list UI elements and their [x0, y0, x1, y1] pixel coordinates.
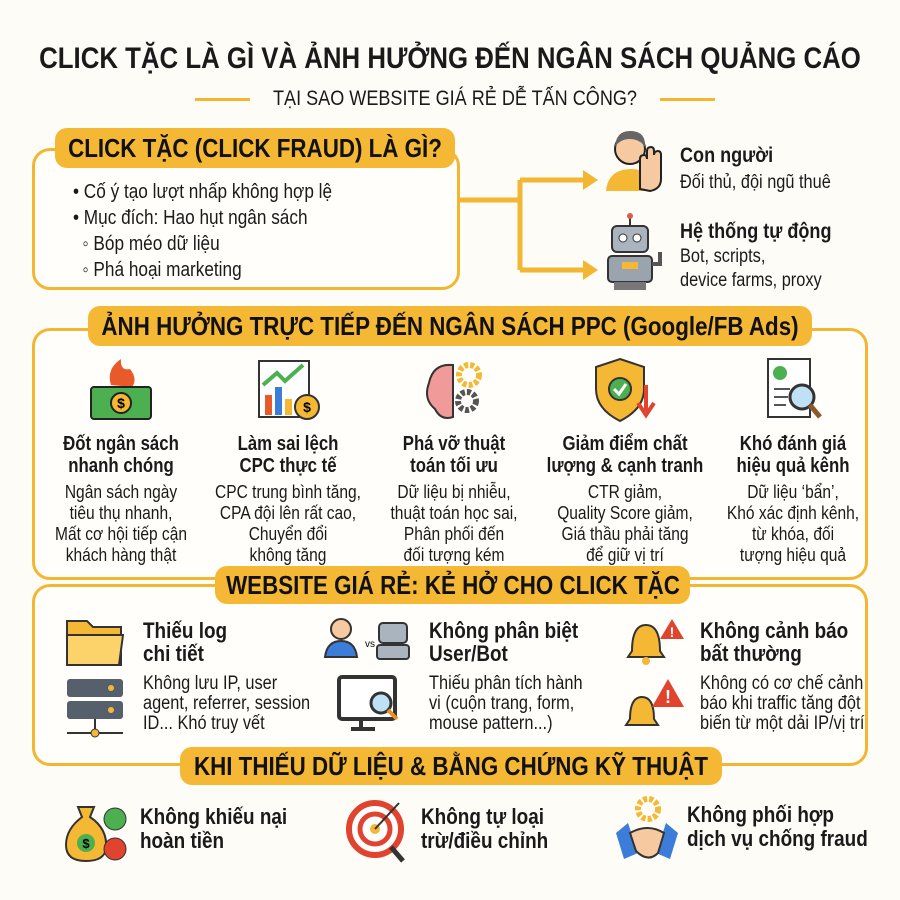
column: CPC	[215, 360, 361, 565]
icon: user vs bot & monitor	[324, 618, 410, 731]
item: missing logs: Thiếu log	[143, 618, 227, 643]
column: algorithm: thuật toán học sai,	[390, 502, 517, 523]
column: algorithm: Phân phối đến	[404, 523, 504, 544]
item: no refund	[65, 804, 287, 862]
text: human: Đối thủ, đội ngũ thuê	[680, 172, 831, 193]
bullet list: ◦ Phá hoại marketing	[83, 259, 242, 281]
title: CLICK TẶC LÀ GÌ VÀ ẢNH HƯỞNG ĐẾN NGÂN SÁCH QUẢNG CÁO	[39, 42, 861, 75]
column: channel evaluation: Khó đánh giá	[740, 433, 846, 455]
item: no anti-fraud service: Không phối hợp	[687, 802, 834, 827]
icon: chart: $	[303, 399, 311, 415]
item: missing logs: agent, referrer, session	[143, 693, 310, 714]
icon: target	[346, 800, 405, 863]
item: no exclusion: trừ/điều chỉnh	[421, 828, 548, 853]
text: automated: Hệ thống tự động	[680, 220, 832, 243]
icon: burning money	[90, 359, 152, 420]
column: CPC: Làm sai lệch	[238, 433, 338, 455]
column: algorithm: đối tượng kém	[404, 544, 504, 565]
item: no alerts	[624, 618, 864, 734]
icon: shield	[595, 358, 656, 422]
bullet list: • Cố ý tạo lượt nhấp không hợp lệ	[73, 181, 332, 203]
icon: chart	[258, 360, 320, 420]
column: burn budget: tiêu thụ nhanh,	[70, 502, 172, 523]
column: burn budget	[55, 359, 187, 565]
icon: robot	[607, 213, 662, 290]
column: channel evaluation: tượng hiệu quả	[740, 544, 846, 565]
subtitle: TẠI SAO WEBSITE GIÁ RẺ DỄ TẤN CÔNG?	[273, 87, 637, 110]
icon: folder & server	[66, 620, 124, 738]
column: burn budget: nhanh chóng	[68, 455, 174, 477]
column: channel evaluation: từ khóa, đối	[752, 523, 834, 544]
text: automated: device farms, proxy	[680, 270, 822, 291]
panel: what is click fraud	[32, 148, 460, 290]
column: CPC: Chuyển đổi	[249, 523, 327, 544]
item: missing logs: chi tiết	[143, 641, 204, 666]
column: quality score	[547, 358, 703, 565]
item: no anti-fraud service: dịch vụ chống fraud	[687, 826, 868, 851]
item: no alerts: Không có cơ chế cảnh	[700, 673, 863, 694]
panel: PPC impact	[32, 328, 868, 580]
column: burn budget: khách hàng thật	[66, 544, 176, 565]
icon: brain gears	[426, 362, 482, 419]
icon: handshake gear	[616, 796, 678, 859]
item: no alerts: bất thường	[700, 641, 802, 666]
icon: report magnifier	[767, 358, 822, 419]
column: CPC: CPC trung bình tăng,	[215, 481, 361, 502]
column: channel evaluation: Khó xác định kênh,	[727, 502, 859, 523]
column: algorithm: toán tối ưu	[410, 455, 498, 477]
item: user vs bot: Không phân biệt	[429, 618, 578, 643]
item: no anti-fraud service	[616, 796, 868, 859]
column: algorithm	[390, 362, 517, 565]
item: no refund: Không khiếu nại	[140, 804, 287, 829]
column: burn budget: Đốt ngân sách	[63, 433, 179, 455]
column: quality score: để giữ vị trí	[586, 544, 664, 565]
heading: lack of evidence: KHI THIẾU DỮ LIỆU & BẰNG CHỨNG KỸ THUẬT	[194, 751, 708, 781]
item: no alerts: biến từ một dải IP/vị trí	[700, 713, 864, 734]
icon: money bag: $	[82, 836, 90, 851]
icon: user vs bot & monitor: vs	[365, 639, 375, 650]
icon: burning money: $	[117, 395, 125, 411]
item: no exclusion: Không tự loại	[421, 804, 544, 829]
icon: bells: !	[665, 687, 671, 707]
column: algorithm: Phá vỡ thuật	[403, 433, 505, 455]
column: CPC: không tăng	[250, 544, 326, 565]
text: automated	[680, 220, 832, 291]
column: burn budget: Mất cơ hội tiếp cận	[55, 523, 187, 544]
item: no alerts: Không cảnh báo	[700, 618, 848, 643]
column: quality score: Giá thầu phải tăng	[561, 523, 688, 544]
column: channel evaluation	[727, 358, 859, 565]
heading: PPC impact: ẢNH HƯỞNG TRỰC TIẾP ĐẾN NGÂN SÁCH PPC (Google/FB Ads)	[101, 311, 799, 341]
icon: bells: !	[670, 624, 674, 640]
item: user vs bot: User/Bot	[429, 641, 508, 666]
icon: bells	[624, 619, 684, 726]
heading: click fraud: CLICK TẶC (CLICK FRAUD) LÀ GÌ?	[68, 133, 442, 163]
column: quality score: CTR giảm,	[588, 481, 662, 502]
item: missing logs: ID... Khó truy vết	[143, 713, 265, 734]
bullet list: • Mục đích: Hao hụt ngân sách	[73, 207, 308, 229]
column: CPC: CPC thực tế	[239, 455, 337, 477]
item: missing logs: Không lưu IP, user	[143, 673, 277, 694]
column: channel evaluation: hiệu quả kênh	[737, 455, 849, 477]
column: channel evaluation: Dữ liệu ‘bẩn’,	[747, 481, 839, 502]
item: user vs bot: Thiếu phân tích hành	[429, 673, 583, 694]
item: no refund: hoàn tiền	[140, 828, 224, 853]
icon: money bag	[65, 806, 126, 862]
column: quality score: lượng & cạnh tranh	[547, 455, 703, 477]
arrow: connector	[460, 170, 598, 280]
column: quality score: Giảm điểm chất	[562, 433, 688, 455]
bullet list: ◦ Bóp méo dữ liệu	[83, 233, 220, 255]
text: human: Con người	[680, 144, 773, 167]
item: user vs bot: mouse pattern...)	[429, 713, 553, 734]
bullet list	[73, 181, 332, 281]
text: human	[680, 144, 831, 193]
column: quality score: Quality Score giảm,	[557, 502, 693, 523]
item: no exclusion	[346, 800, 548, 863]
icon: person	[606, 131, 662, 192]
heading: cheap website: WEBSITE GIÁ RẺ: KẺ HỞ CHO CLICK TẶC	[226, 570, 679, 600]
subtitle	[195, 86, 715, 110]
column: algorithm: Dữ liệu bị nhiễu,	[397, 481, 511, 502]
column: burn budget: Ngân sách ngày	[65, 481, 177, 502]
panel: cheap website	[32, 584, 868, 766]
item: user vs bot: vi (cuộn trang, form,	[429, 693, 574, 714]
item: no alerts: báo khi traffic tăng đột	[700, 693, 860, 714]
column: CPC: CPA đội lên rất cao,	[220, 502, 356, 523]
item: missing logs	[66, 618, 310, 738]
item: user vs bot	[324, 618, 583, 734]
text: automated: Bot, scripts,	[680, 246, 765, 267]
